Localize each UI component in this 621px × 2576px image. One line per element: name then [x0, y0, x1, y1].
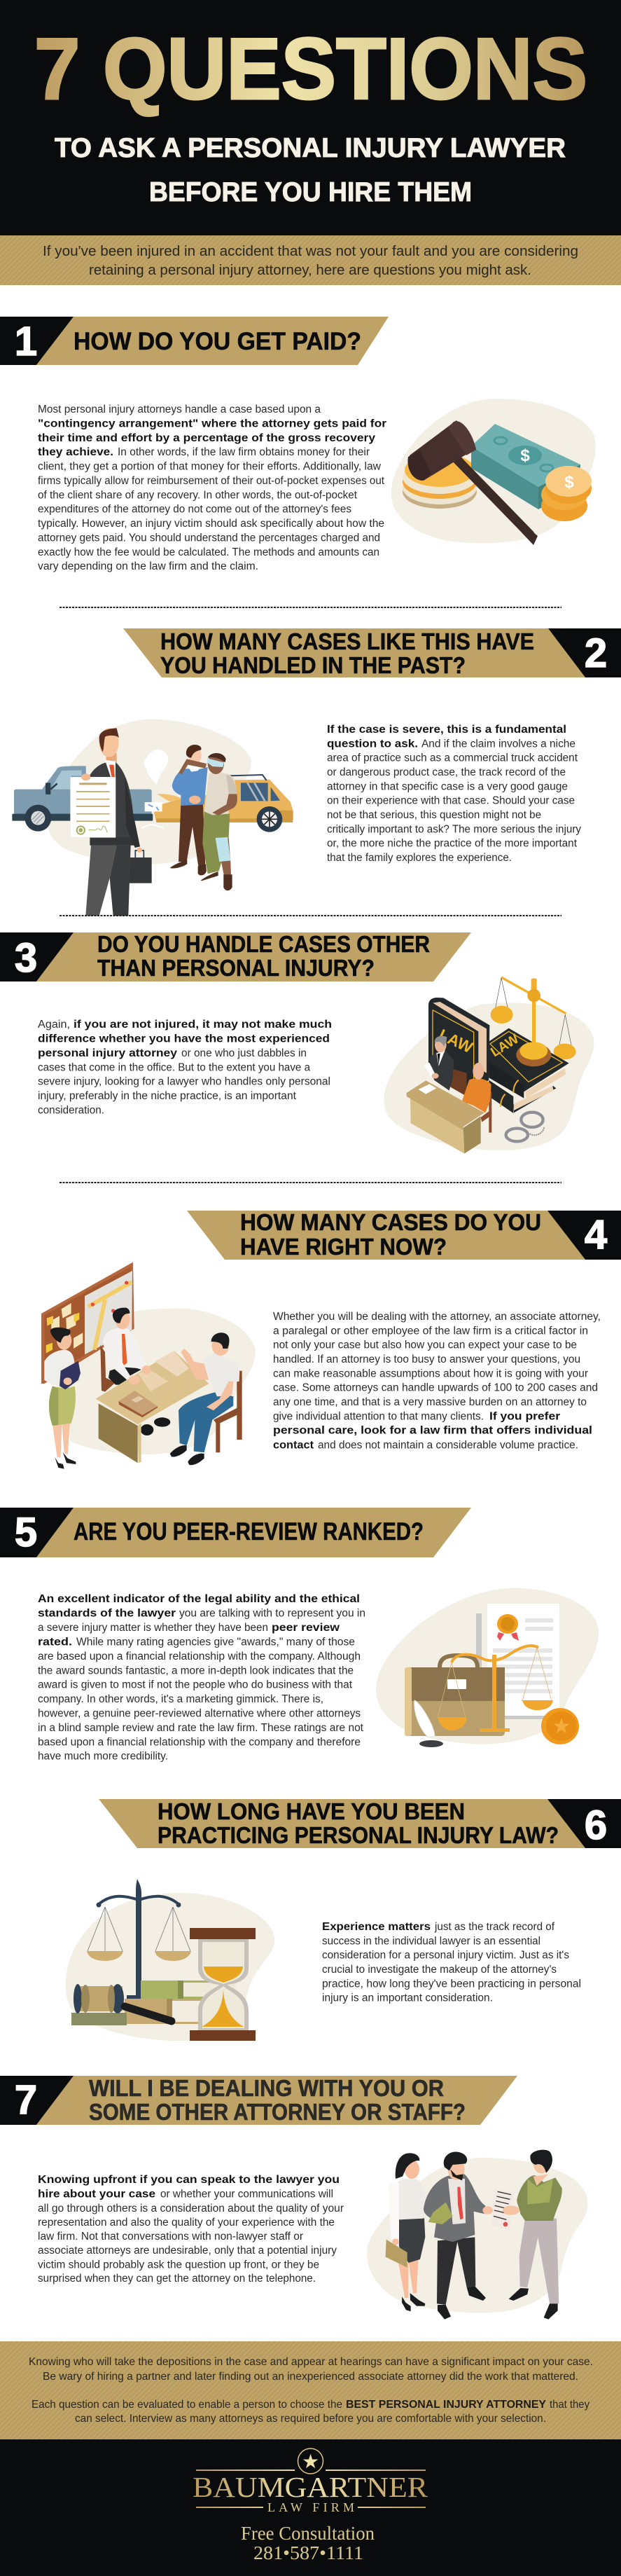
heading 2: [123, 628, 621, 678]
text: question 6: practice, how long they've been practicing in personal: [322, 1978, 581, 1990]
woman: [386, 2153, 426, 2311]
intro band: If you've been injured in an accident that was not your fault and you are considering: [43, 244, 578, 259]
notice board: [41, 1262, 134, 1384]
text: question 7: representation and also the quality of your experience with the: [38, 2217, 335, 2229]
text: question 7: surprised when they can get the attorney on the telephone.: [38, 2273, 316, 2285]
text: question 2: or, the more niche the practice of the more important: [327, 838, 578, 850]
text: question 1: [38, 404, 386, 572]
text: question 2: or dangerous product case, the track record of the: [327, 766, 566, 778]
heading 1: HOW DO YOU GET PAID?: [74, 328, 361, 355]
text: question 5: based upon a financial relationship with the company and therefore: [38, 1736, 361, 1748]
text: question 5: award is given to most if not the people who do business with that: [38, 1679, 353, 1691]
handcuffs: [506, 1113, 544, 1141]
text: question 3: consideration.: [38, 1104, 104, 1116]
heading 4: [187, 1209, 621, 1260]
text: question 3: difference whether you have the most experienced: [38, 1033, 330, 1045]
text: question 2: question to ask.: [327, 738, 418, 750]
heading 1: 1: [15, 319, 37, 364]
text: question 1: their time and effort by a percentage of the gross recovery: [38, 432, 375, 444]
text: question 3: injury, preferably in the niche practice, is an important: [38, 1090, 297, 1102]
closing band: BEST PERSONAL INJURY ATTORNEY: [346, 2399, 546, 2411]
text: question 1: client, they get a portion of that money for their efforts. Additionally, law: [38, 461, 382, 472]
text: question 6: Experience matters: [322, 1921, 431, 1933]
text: question 1: exactly how the fee would be calculated. The methods and amounts can: [38, 546, 379, 558]
text: question 7: law firm. Not that conversations with non-lawyer staff or: [38, 2231, 303, 2243]
text: question 2: If the case is severe, this is a fundamental: [327, 724, 566, 736]
heading 6: [99, 1798, 621, 1848]
text: question 4: not only your case but also how you can expect your case to be: [273, 1339, 577, 1351]
text: question 7: Knowing upfront if you can speak to the lawyer you: [38, 2174, 340, 2186]
lawyer: [71, 728, 152, 916]
heading 3: THAN PERSONAL INJURY?: [97, 955, 375, 981]
header panel: [0, 0, 621, 235]
heading 7: SOME OTHER ATTORNEY OR STAFF?: [89, 2099, 466, 2125]
closing band: that they: [550, 2399, 589, 2411]
intro band: retaining a personal injury attorney, here are questions you might ask.: [89, 263, 531, 278]
illustration: certificate, briefcase, scale: [376, 1588, 599, 1747]
text: question 1: Most personal injury attorneys handle a case based upon a: [38, 404, 321, 415]
heading 5: ARE YOU PEER-REVIEW RANKED?: [74, 1518, 424, 1545]
text: question 4: case. Some attorneys can handle upwards of 100 to 200 cases and: [273, 1382, 598, 1394]
judge: [424, 1036, 454, 1091]
text: question 7: victim should probably ask the question up front, or they be: [38, 2259, 319, 2271]
heading 2: YOU HANDLED IN THE PAST?: [160, 652, 466, 678]
text: question 6: consideration for a personal injury victim. Just as it's: [322, 1950, 569, 1962]
logo: Baumgartner Law Firm: [193, 2448, 428, 2514]
text: question 7: or whether your communications will: [160, 2188, 333, 2200]
text: question 3: Again,: [38, 1019, 70, 1031]
desk: [407, 1080, 484, 1154]
upper book: LAW: [489, 1031, 522, 1060]
document: [492, 2189, 519, 2230]
title: 7 QUESTIONS: [34, 21, 587, 118]
injured man: [201, 753, 237, 890]
text: question 3: severe injury, looking for a lawyer who handles only personal: [38, 1076, 330, 1088]
closing band: Be wary of hiring a partner and later finding out an inexperienced associate attorney did the work that mattered.: [43, 2371, 578, 2383]
subtitle: BEFORE YOU HIRE THEM: [149, 177, 472, 207]
subtitle: [55, 133, 566, 207]
text: question 6: [322, 1921, 581, 2004]
text: question 2: And if the claim involves a niche: [421, 738, 575, 750]
text: question 2: [327, 724, 581, 864]
text: question 4: Whether you will be dealing with the attorney, an associate attorney,: [273, 1311, 601, 1323]
heading 4: HOW MANY CASES DO YOU: [240, 1209, 541, 1235]
text: question 3: cases that come in the office. But to the extent you have a: [38, 1061, 310, 1073]
footer panel: [0, 2439, 621, 2576]
text: question 4: personal care, look for a law firm that offers individual: [273, 1425, 592, 1437]
heading 4: HAVE RIGHT NOW?: [240, 1234, 447, 1260]
text: question 7: associate attorneys are undesirable, only that a potential injury: [38, 2245, 337, 2257]
text: question 3: or one who just dabbles in: [181, 1047, 307, 1059]
text: question 4: [273, 1311, 601, 1451]
heading 6: HOW LONG HAVE YOU BEEN: [158, 1798, 465, 1824]
text: question 5: you are talking with to represent you in: [179, 1607, 365, 1619]
text: question 5: however, a genuine peer-reviewed alternative where other attorneys: [38, 1708, 361, 1720]
heading 4: 4: [585, 1212, 607, 1258]
man in green: [509, 2150, 562, 2320]
heading 3: [0, 931, 471, 982]
closing band: [0, 2341, 621, 2439]
text: question 5: company. In other words, it's a marketing gimmick. There is,: [38, 1693, 323, 1705]
text: question 3: personal injury attorney: [38, 1047, 177, 1059]
text: question 3: [38, 1019, 332, 1116]
text: question 5: in a blind sample review and rate the law firm. These ratings are not: [38, 1722, 364, 1734]
text: question 1: attorney gets paid. You should understand the percentages charged and: [38, 532, 380, 544]
table: [96, 1351, 209, 1463]
text: question 5: rated.: [38, 1637, 72, 1648]
lower book: [489, 1080, 556, 1113]
subtitle: TO ASK A PERSONAL INJURY LAWYER: [55, 133, 566, 163]
text: question 6: just as the track record of: [434, 1921, 555, 1933]
logo: Baumgartner Law Firm: ★: [302, 2451, 319, 2472]
text: question 1: expenditures of the attorney do not come out of the attorney's fees: [38, 504, 351, 516]
heading 7: WILL I BE DEALING WITH YOU OR: [89, 2075, 444, 2101]
text: question 4: can make reasonable assumptions about how it is going with your: [273, 1368, 588, 1379]
standing book: LAW: [436, 1025, 476, 1056]
text: question 2: not be that serious, this question might not be: [327, 809, 541, 821]
closing band: Each question can be evaluated to enable a person to choose the: [32, 2399, 342, 2411]
text: question 2: that the family explores the experience.: [327, 852, 512, 864]
text: question 1: firms typically allow for reimbursement of their out-of-pocket expenses out: [38, 475, 385, 487]
text: question 1: they achieve.: [38, 446, 113, 458]
text: question 6: injury is an important consideration.: [322, 1992, 493, 2004]
illustration: certificate, briefcase, scale: ★: [552, 1715, 571, 1738]
text: question 5: are based upon a financial relationship with the company. Although: [38, 1651, 361, 1662]
closing band: can select. Interview as many attorneys as required before you are comfortable with your selection.: [75, 2413, 546, 2425]
heading 6: PRACTICING PERSONAL INJURY LAW?: [158, 1822, 559, 1848]
text: question 6: success in the individual lawyer is an essential: [322, 1935, 540, 1947]
man behind desk: [100, 1308, 170, 1435]
intro band: [0, 235, 621, 285]
text: question 1: of the client share of any recovery. In other words, the out-of-pocket: [38, 489, 358, 501]
text: question 1: "contingency arrangement" where the attorney gets paid for: [38, 418, 386, 429]
text: question 4: give individual attention to that many clients.: [273, 1410, 484, 1422]
heading 3: DO YOU HANDLE CASES OTHER: [97, 931, 430, 957]
contact details: [241, 2523, 375, 2563]
text: question 5: the award sounds fantastic, a more in-depth look indicates that the: [38, 1665, 354, 1676]
contact details: Free Consultation: [241, 2523, 375, 2544]
illustration: lawyer with accident victims: [12, 719, 293, 916]
woman: [44, 1328, 81, 1469]
text: question 3: if you are not injured, it may not make much: [74, 1019, 332, 1031]
client: [170, 1332, 242, 1465]
text: question 7: [38, 2174, 344, 2285]
text: question 1: vary depending on the law firm and the claim.: [38, 560, 258, 572]
text: question 2: attorney in that specific case is a very good gauge: [327, 780, 568, 792]
heading 7: 7: [15, 2077, 37, 2123]
text: question 7: hire about your case: [38, 2188, 155, 2200]
man in blue sweater: [170, 745, 208, 876]
text: question 1: In other words, if the law firm obtains money for their: [118, 446, 370, 458]
logo: Baumgartner Law Firm: BAUMGARTNER: [193, 2471, 428, 2503]
text: question 2: critically important to ask? The more serious the injury: [327, 823, 581, 835]
text: question 4: handled. If an attorney is too busy to answer your questions, you: [273, 1354, 580, 1365]
illustration: gavel, money and coins: $: [520, 446, 530, 465]
text: question 1: typically. However, an injury victim should ask specifically about how the: [38, 518, 384, 530]
illustration: client meeting at law office: [41, 1262, 256, 1469]
heading 2: 2: [585, 631, 607, 676]
text: question 5: standards of the lawyer: [38, 1607, 176, 1619]
contact details: 281•587•1111: [253, 2542, 363, 2563]
closing band: Knowing who will take the depositions in the case and appear at hearings can have a significant impact on your case.: [29, 2356, 593, 2368]
text: question 5: An excellent indicator of the legal ability and the ethical: [38, 1593, 360, 1605]
illustration: scale, gavel, books, hourglass: [66, 1879, 274, 2041]
man in suit: [424, 2152, 493, 2320]
heading 2: HOW MANY CASES LIKE THIS HAVE: [160, 628, 534, 654]
text: question 4: If you prefer: [489, 1410, 560, 1422]
text: question 4: a paralegal or other employee of the law firm is a critical factor in: [273, 1325, 588, 1337]
text: question 4: contact: [273, 1439, 314, 1451]
prisoner: [459, 1063, 491, 1133]
illustration: law books, scales, courtroom: [384, 977, 594, 1154]
text: question 5: While many rating agencies give "awards," many of those: [76, 1637, 355, 1648]
text: question 6: crucial to investigate the makeup of the attorney's: [322, 1964, 557, 1976]
heading 6: 6: [585, 1803, 607, 1848]
heading 7: [0, 2075, 517, 2125]
text: question 5: have much more credibility.: [38, 1751, 168, 1763]
standing book: [428, 998, 489, 1094]
text: question 4: and does not maintain a considerable volume practice.: [318, 1439, 578, 1451]
text: question 4: any one time, and that is a very massive burden on an attorney to: [273, 1396, 587, 1408]
text: question 5: peer review: [272, 1622, 340, 1634]
heading 5: 5: [15, 1510, 37, 1555]
text: question 5: a severe injury matter is whether they have been: [38, 1622, 268, 1634]
illustration: gavel, money and coins: [391, 399, 596, 545]
text: question 2: on their experience with that case. Should your case: [327, 795, 575, 807]
text: question 7: all go through others is a consideration about the quality of your: [38, 2203, 344, 2215]
heading 1: [0, 317, 389, 365]
heading 5: [0, 1508, 471, 1557]
text: question 5: [38, 1593, 365, 1763]
heading 3: 3: [15, 935, 37, 981]
upper book: [489, 1028, 569, 1098]
illustration: three people talking: [367, 2150, 587, 2320]
logo: Baumgartner Law Firm: LAW FIRM: [267, 2500, 354, 2514]
text: question 2: area of practice such as a commercial truck accident: [327, 752, 578, 764]
illustration: gavel, money and coins: $: [564, 473, 574, 492]
